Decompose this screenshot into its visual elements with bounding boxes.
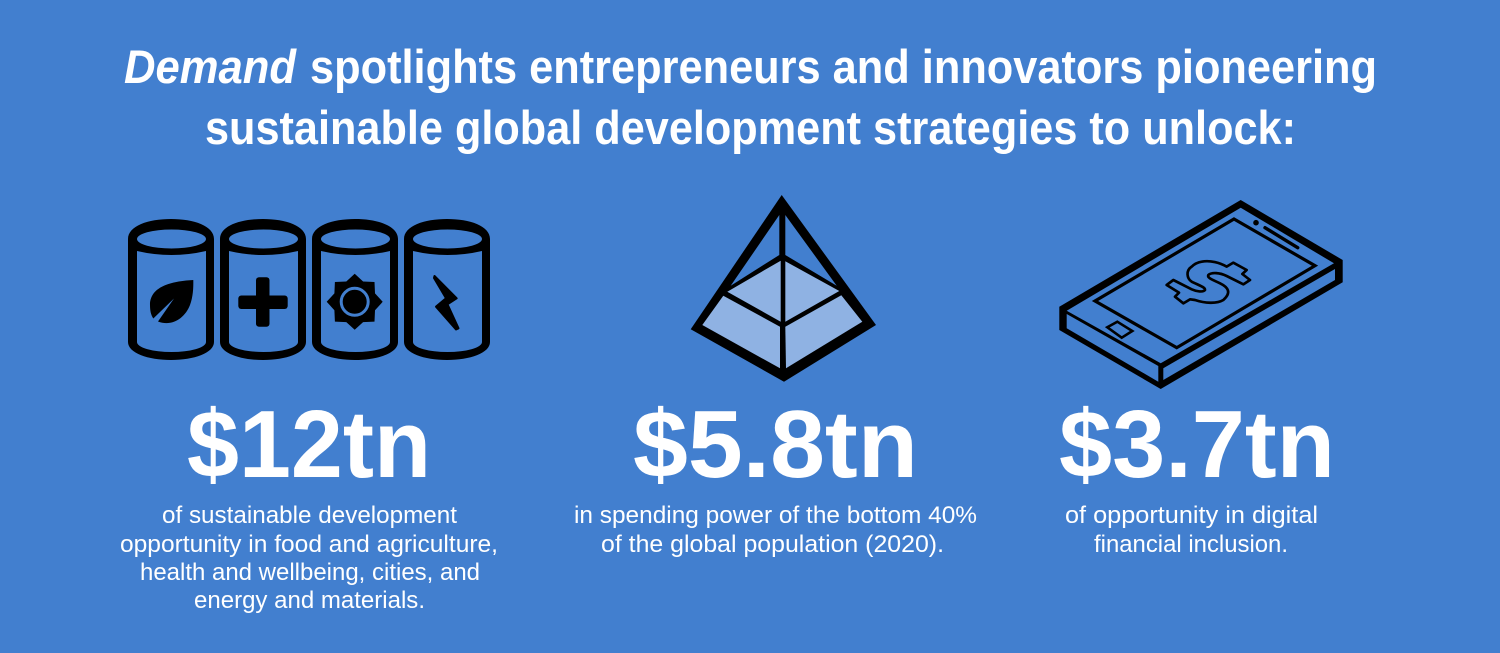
icon: cylinder with plus	[220, 219, 306, 360]
text: sustainable development description: opportunity in food and agriculture,	[120, 531, 498, 558]
stat: $12tn: $12tn	[187, 391, 431, 498]
text: spending power description: in spending power of the bottom 40%	[574, 502, 977, 529]
icon: cylinder with leaf	[128, 219, 214, 360]
text: spending power description	[574, 502, 977, 558]
text: spending power description: of the global population (2020).	[601, 531, 944, 558]
icon: cylinder with lightning bolt	[404, 219, 490, 360]
title: sustainable global development strategies to unlock:	[205, 101, 1296, 154]
stat: $3.7tn: $3.7tn	[1059, 391, 1335, 498]
title	[124, 40, 1377, 154]
text: digital inclusion description	[1065, 502, 1318, 558]
icon: four cylinders	[128, 219, 490, 360]
title: spotlights entrepreneurs and innovators pioneering	[310, 40, 1377, 93]
icon: smartphone with dollar sign	[1059, 200, 1343, 389]
text: digital inclusion description: of opportunity in digital	[1065, 502, 1318, 529]
icon: pyramid	[691, 195, 876, 382]
text: sustainable development description	[120, 502, 498, 614]
text: sustainable development description: energy and materials.	[194, 587, 425, 614]
title: Demand	[124, 40, 297, 93]
icon: dollar sign	[1167, 261, 1250, 303]
text: sustainable development description: health and wellbeing, cities, and	[140, 559, 480, 586]
text: digital inclusion description: financial inclusion.	[1094, 531, 1288, 558]
stat: $5.8tn: $5.8tn	[633, 391, 918, 498]
icon: cylinder with sun	[312, 219, 398, 360]
text: sustainable development description: of sustainable development	[162, 502, 457, 529]
